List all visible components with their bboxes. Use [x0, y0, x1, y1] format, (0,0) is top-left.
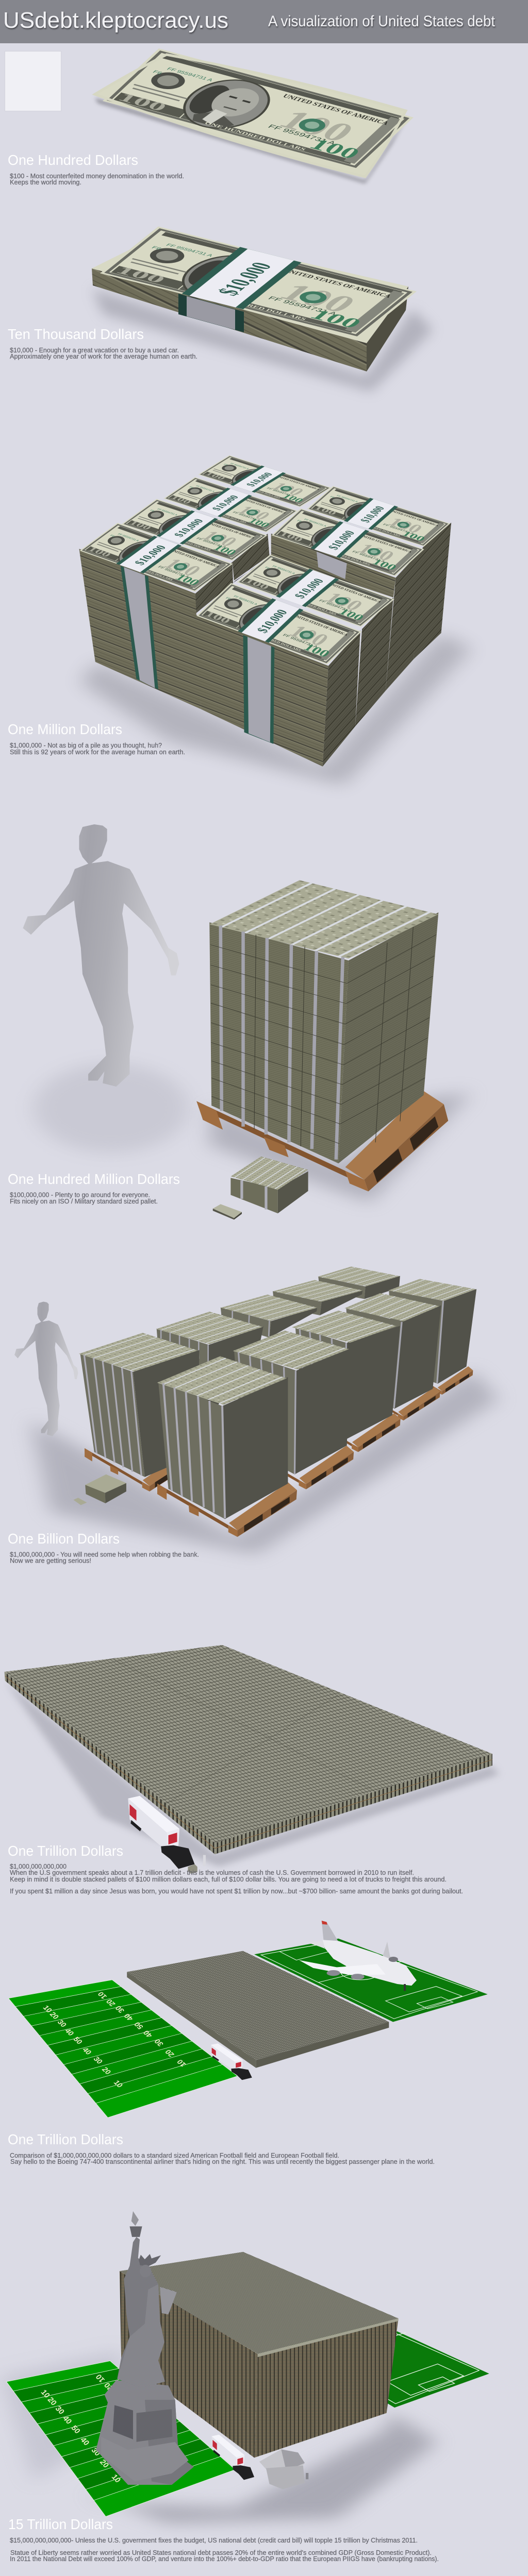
description: Keep in mind it is double stacked pallets of $100 million dollars each, full of $100 dollar bills. You are going to need a lot of trucks to freight this around.	[10, 1876, 447, 1883]
description: Say hello to the Boeing 747-400 transcontinental airliner that's hiding on the right. This was until recently the biggest passenger plane in the world.	[10, 2158, 435, 2165]
heading: One Billion Dollars	[8, 1531, 120, 1547]
panel: ten thousand dollars	[8, 227, 433, 392]
description: $10,000 - Enough for a great vacation or to buy a used car.	[10, 347, 179, 354]
description: Statue of Liberty seems rather worried as United States national debt passes 20% of the entire world's combined GDP (Gross Domestic Product).	[10, 2549, 432, 2556]
blank ad placeholder box	[5, 52, 61, 111]
European football field	[256, 2305, 489, 2408]
description: Approximately one year of work for the average human on earth.	[10, 353, 197, 360]
description	[10, 742, 185, 756]
description	[10, 1191, 158, 1205]
description: Still this is 92 years of work for the average human on earth.	[10, 749, 185, 756]
bill shadow	[95, 98, 407, 183]
description: In 2011 the National Debt will exceed 100% of GDP, and venture into the 100%+ debt-to-GDP ratio that the European PIIGS have (bankrupting nations).	[10, 2555, 439, 2563]
icon: ten thousand dollar bundle	[92, 227, 417, 371]
European football field	[254, 1939, 488, 2022]
one million dollar stack	[213, 1204, 242, 1219]
illustration: person, pallet and cash	[23, 824, 472, 1219]
bundle shadow	[92, 289, 433, 392]
icon: truck	[128, 1796, 194, 1869]
panel: one billion dollars	[8, 1266, 499, 1565]
front left pallet	[79, 1333, 200, 1492]
money pile	[120, 2252, 399, 2489]
title: USdebt.kleptocracy.us	[3, 8, 228, 33]
illustration: stacks of ten thousand dollar bundles	[79, 455, 471, 785]
icon: truck	[211, 2043, 252, 2080]
description: $1,000,000 - Not as big of a pile as you thought, huh?	[10, 742, 162, 749]
description	[10, 2152, 435, 2165]
description: $100,000,000 - Plenty to go around for everyone.	[10, 1191, 150, 1198]
description: When the U.S government speaks about a 1.7 trillion deficit - this is the volumes of cash the U.S. Government borrowed in 2010 to run itself.	[10, 1869, 414, 1876]
icon: hundred dollar bill	[95, 48, 414, 177]
stack of 100 million dollars	[209, 880, 438, 1163]
heading: One Hundred Million Dollars	[8, 1171, 180, 1187]
panel: one million dollars	[8, 455, 471, 785]
heading: 15 Trillion Dollars	[8, 2516, 113, 2532]
ten million dollar stack	[85, 1475, 126, 1503]
panel: fifteen trillion dollars	[0, 2211, 489, 2563]
panel: one trillion dollars compared to football fields	[8, 1921, 488, 2165]
description: Fits nicely on an ISO / Military standard sized pallet.	[10, 1198, 158, 1205]
description	[10, 347, 197, 360]
description: Keeps the world moving.	[10, 179, 81, 186]
icon: wooden pallet	[196, 1090, 472, 1196]
description	[10, 1551, 199, 1565]
illustration: double stacked pallets, truck and person	[4, 1645, 499, 1874]
icon: pallet box	[188, 1864, 197, 1874]
icon: Statue of Liberty	[96, 2211, 194, 2485]
heading: One Trillion Dollars	[8, 1843, 123, 1859]
heading: One Hundred Dollars	[8, 152, 138, 168]
money slab	[127, 1951, 389, 2068]
back row of pallets	[156, 1266, 476, 1452]
American football field	[8, 1980, 237, 2117]
description: $1,000,000,000,000	[10, 1863, 67, 1870]
front pallet	[157, 1356, 297, 1537]
icon: person	[14, 1302, 78, 1436]
American football field	[6, 2361, 235, 2517]
description: If you spent $1 million a day since Jesus was born, you would have not spent $1 trillion by now...but ~$700 billion- same amount the banks got during bailout.	[10, 1888, 463, 1895]
panel: one trillion dollars slab	[4, 1645, 499, 1895]
description	[10, 1863, 463, 1895]
icon: Boeing 747-400 airliner	[299, 1921, 417, 1991]
description	[10, 2537, 439, 2563]
icon: truck	[211, 2435, 254, 2480]
heading: One Million Dollars	[8, 721, 122, 737]
description: Comparison of $1,000,000,000,000 dollars to a standard sized American Football field and European Football field.	[10, 2152, 339, 2159]
description: Now we are getting serious!	[10, 1557, 91, 1565]
illustration: fields, money slab and airliner	[8, 1921, 488, 2117]
description: $100 - Most counterfeited money denomination in the world.	[10, 173, 184, 180]
shadow of the pile	[0, 2350, 438, 2523]
icon: house	[259, 2449, 305, 2489]
subtitle: A visualization of United States debt	[268, 13, 496, 30]
illustration: ten pallets	[14, 1266, 499, 1554]
one million dollar stack	[73, 1498, 87, 1505]
icon: person	[23, 824, 179, 1087]
panel: one hundred million dollars	[8, 824, 472, 1219]
description	[10, 173, 184, 186]
description: $15,000,000,000,000- Unless the U.S. government fixes the budget, US national debt (credit card bill) will topple 15 trillion by Christmas 2011.	[10, 2537, 418, 2544]
description: $1,000,000,000 - You will need some help when robbing the bank.	[10, 1551, 199, 1558]
heading: One Trillion Dollars	[8, 2131, 123, 2147]
icon: tiny person	[306, 2473, 308, 2479]
middle pallet	[233, 1331, 354, 1489]
header banner	[0, 0, 528, 43]
panel: one hundred dollars	[8, 48, 414, 186]
heading: Ten Thousand Dollars	[8, 326, 144, 342]
icon: tiny person	[203, 1855, 206, 1866]
ten million dollar stack	[230, 1157, 308, 1213]
